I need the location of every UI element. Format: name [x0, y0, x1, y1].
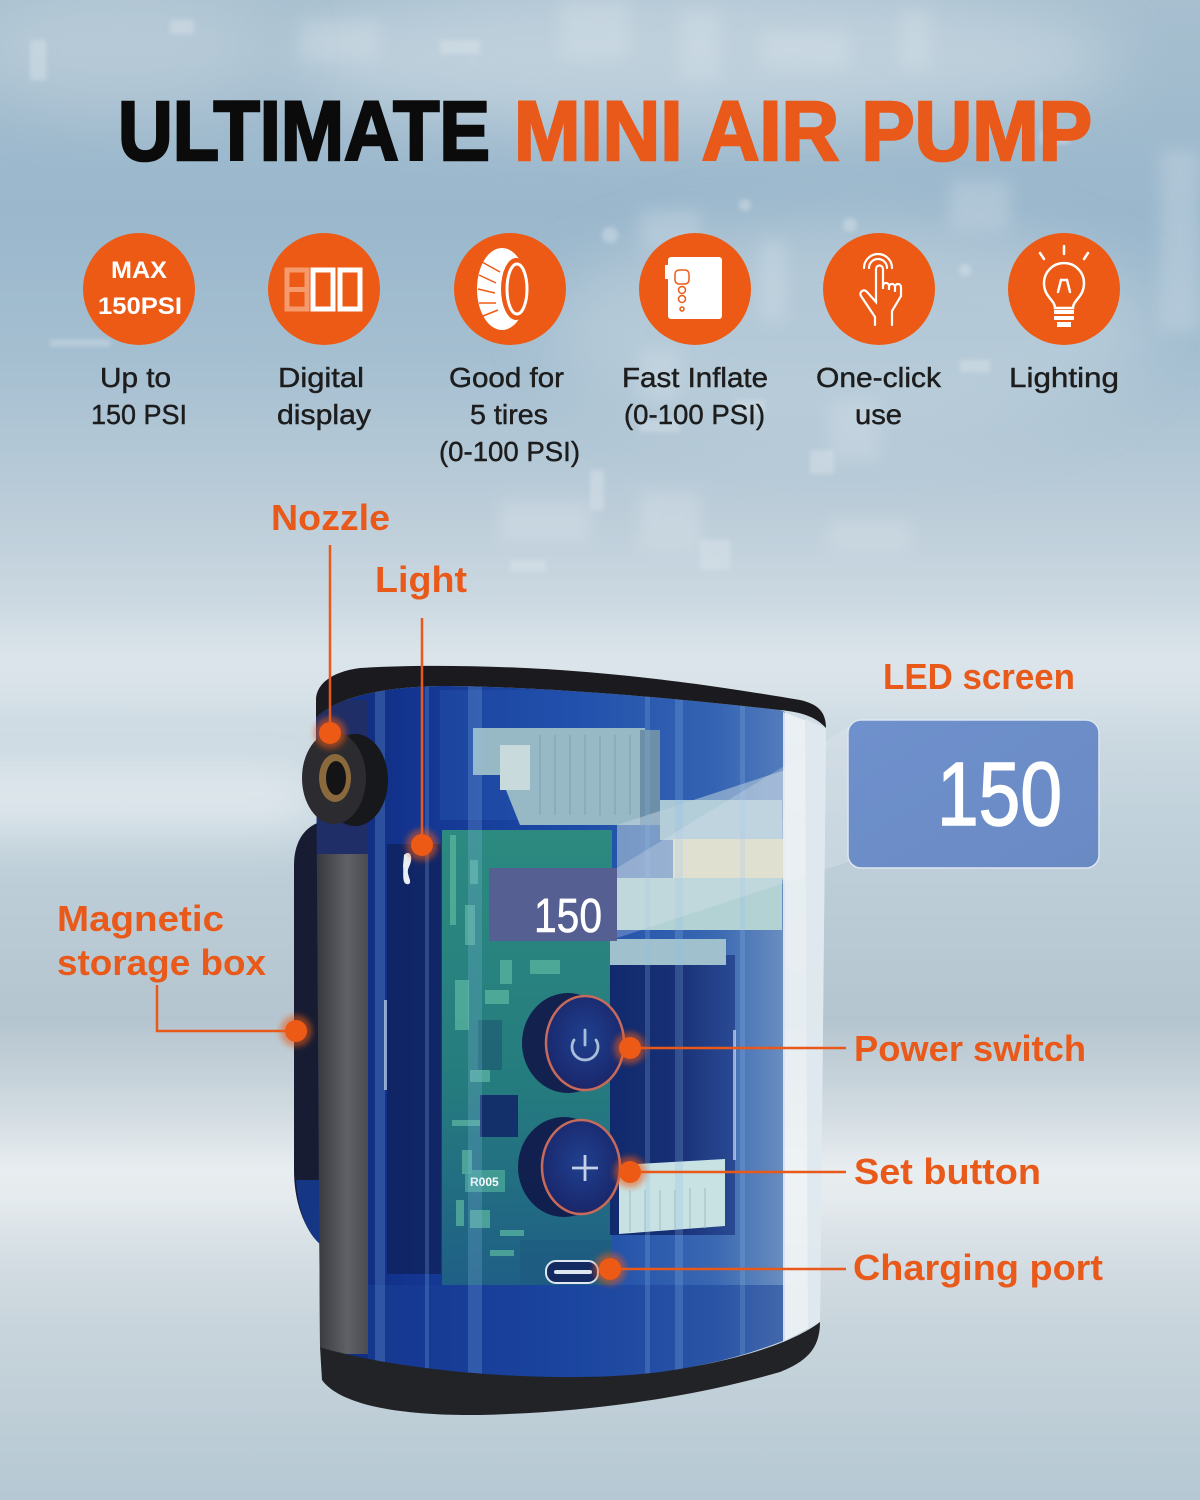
top cap: [316, 666, 826, 728]
callout: set button: Set button: [854, 1151, 1041, 1192]
top mechanism coil: [473, 728, 660, 825]
title: [118, 84, 1092, 178]
callout: magnetic storage box: storage box: [57, 942, 266, 983]
top band texture: [440, 690, 785, 820]
feature: fast inflate: (0-100 PSI): [624, 399, 765, 430]
transparent front body: [316, 680, 786, 1390]
callout: charging port: [594, 1247, 1103, 1288]
feature: fast inflate: [622, 233, 768, 430]
title: MINI AIR PUMP: [514, 84, 1092, 178]
lcd display: 150: [534, 890, 602, 943]
callout: nozzle: [271, 497, 390, 749]
feature: digital display: Digital: [278, 362, 364, 393]
lcd display: [489, 868, 617, 943]
feature: max 150 psi: MAX: [111, 257, 167, 284]
feature: tires: 5 tires: [470, 399, 548, 430]
callout: light: [375, 559, 467, 861]
grey side panel: [316, 854, 368, 1354]
pcb: [442, 830, 612, 1285]
light streaks over internals: [375, 680, 745, 1390]
power button: [522, 993, 624, 1093]
right clear section: [783, 712, 826, 1342]
feature: one-click: [816, 233, 942, 430]
led beam to zoom panel: [617, 727, 848, 938]
feature: max 150 psi: 150PSI: [98, 293, 182, 320]
callout: magnetic storage box: [57, 898, 312, 1047]
set button: [518, 1117, 620, 1217]
gear assembly: [617, 770, 785, 930]
callout: nozzle: Nozzle: [271, 497, 390, 538]
usb-c port: [546, 1261, 598, 1283]
feature: one-click: use: [855, 399, 902, 430]
feature: max 150 psi: 150 PSI: [91, 399, 187, 430]
bottom cap: [320, 1322, 820, 1415]
callout: power switch: [614, 1028, 1086, 1069]
nozzle: [302, 732, 388, 826]
callout: led screen: LED screen: [883, 656, 1075, 697]
feature: max 150 psi: Up to: [100, 362, 171, 393]
callout: power switch: Power switch: [854, 1028, 1086, 1069]
vertical light highlights: [384, 1000, 736, 1160]
light: [403, 853, 411, 884]
feature: tires: Good for: [449, 362, 564, 393]
feature: digital display: [268, 233, 380, 430]
feature: tires: [439, 233, 580, 467]
callout: led screen: 150: [937, 745, 1062, 845]
pcb: R005: [470, 1175, 499, 1189]
motor: [610, 939, 735, 1235]
callout: charging port: Charging port: [853, 1247, 1103, 1288]
pump device: [294, 666, 848, 1415]
callout: set button: [614, 1151, 1041, 1192]
feature: tires: (0-100 PSI): [439, 436, 580, 467]
callout: magnetic storage box: Magnetic: [57, 898, 224, 939]
feature: one-click: One-click: [816, 362, 942, 393]
battery section: [387, 844, 441, 1274]
feature: max 150 psi: [83, 233, 195, 430]
lower body shade: [368, 1285, 785, 1385]
magnetic storage box: [294, 822, 320, 1244]
feature: lighting: [1008, 233, 1120, 393]
feature: lighting: Lighting: [1009, 362, 1119, 393]
callout: led screen: [848, 656, 1099, 868]
feature: fast inflate: Fast Inflate: [622, 362, 768, 393]
title: ULTIMATE: [118, 84, 490, 178]
feature: digital display: display: [277, 399, 371, 430]
callout: light: Light: [375, 559, 467, 600]
